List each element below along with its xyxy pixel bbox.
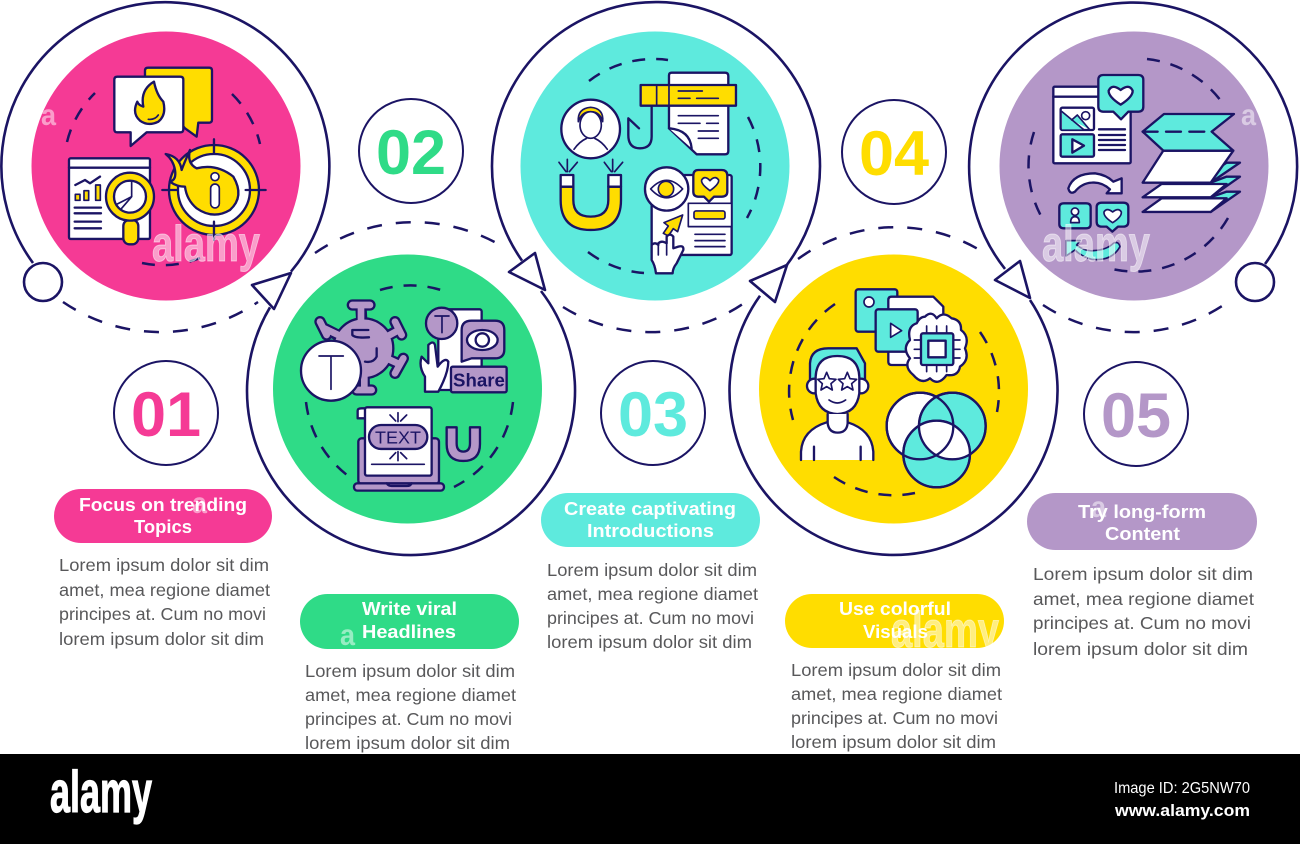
watermarks: alamy	[1042, 216, 1150, 272]
text block: step 4: principes at. Cum no movi	[791, 708, 998, 728]
icon: headline hook and document	[628, 73, 736, 154]
footer bar	[0, 754, 1300, 844]
icon: attraction magnet	[559, 159, 623, 230]
panel: step 2 green disc	[273, 254, 542, 524]
icon: chat bubbles with flame	[114, 68, 212, 146]
text block: step 1: amet, mea regione diamet	[59, 580, 270, 600]
label pill: Focus on trending Topics	[54, 489, 272, 543]
label pill: Write viral Headlines	[300, 594, 519, 649]
text block: step 2: Lorem ipsum dolor sit dim	[305, 661, 515, 681]
step 3 ring and dashed connector	[492, 2, 820, 332]
footer logo: alamy	[50, 760, 152, 825]
text block: step 4	[791, 660, 1002, 752]
number badge 04: 04	[859, 119, 929, 189]
icon: share document with eye: Share	[453, 369, 505, 390]
text block: step 1: Lorem ipsum dolor sit dim	[59, 555, 269, 575]
text block: step 2: principes at. Cum no movi	[305, 709, 512, 729]
panel: step 4 yellow disc	[759, 254, 1028, 524]
watermarks: a	[340, 619, 355, 652]
arrow: step 2 to 3	[509, 253, 545, 290]
panel: step 1 pink disc	[32, 32, 300, 300]
icon: horseshoe magnet	[447, 427, 480, 461]
text block: step 5: lorem ipsum dolor sit dim	[1033, 639, 1248, 659]
label pill: Create captivating Introductions: Introductions	[587, 521, 714, 541]
text block: step 2: lorem ipsum dolor sit dim	[305, 733, 510, 753]
number badge 01: 01	[131, 380, 201, 450]
number badge 05: 05	[1101, 381, 1171, 451]
text block: step 4: Lorem ipsum dolor sit dim	[791, 660, 1001, 680]
text block: step 1	[59, 555, 270, 649]
watermarks: a	[192, 487, 207, 520]
text block: step 2	[305, 661, 516, 753]
icon: virus with T badge	[301, 305, 403, 401]
icon: long-form post with like	[1053, 75, 1143, 163]
text block: step 5: principes at. Cum no movi	[1033, 613, 1251, 633]
text block: step 3: Lorem ipsum dolor sit dim	[547, 560, 757, 580]
icon: person with star eyes	[801, 348, 873, 460]
text block: step 5: amet, mea regione diamet	[1033, 589, 1254, 609]
website: www.alamy.com	[1114, 801, 1250, 820]
arrow: step 3 to 4	[750, 265, 787, 302]
number badge 03: 03	[618, 380, 688, 450]
icon: laptop with text headline	[354, 407, 444, 491]
label pill: Write viral Headlines: Headlines	[362, 622, 456, 642]
step 4 ring and dashed connector	[730, 227, 1058, 555]
icon: colour venn diagram	[887, 393, 986, 487]
watermarks	[41, 99, 1256, 658]
icon: swap arrows and reaction bubbles	[1059, 173, 1128, 260]
label pill: Use colorful Visuals: Use colorful	[839, 599, 951, 619]
icon: person in circle	[561, 100, 620, 158]
arrow: step 4 to 5	[995, 261, 1030, 298]
text block: step 3: amet, mea regione diamet	[547, 584, 758, 604]
icon: eye, post and pointing hand	[645, 167, 732, 273]
panel: step 5 purple disc	[1000, 32, 1268, 300]
watermarks: a	[1241, 99, 1256, 132]
text block: step 1: principes at. Cum no movi	[59, 604, 266, 624]
number badge 03	[601, 361, 705, 465]
icon: laptop with text headline: TEXT	[375, 428, 421, 448]
label pill: Create captivating Introductions: Create captivating	[564, 499, 736, 519]
label pill: Focus on trending Topics: Focus on trending	[79, 495, 247, 515]
watermarks: a	[1091, 491, 1106, 524]
text block: step 3: principes at. Cum no movi	[547, 608, 754, 628]
label pill: Use colorful Visuals: Visuals	[863, 622, 928, 642]
icon: folded pages stack	[1143, 114, 1240, 212]
icon: report with magnifier	[69, 158, 154, 244]
number badge 05	[1084, 362, 1188, 466]
label pill: Create captivating Introductions	[541, 493, 760, 547]
panel: step 3 teal disc	[520, 32, 790, 300]
text block: step 4: amet, mea regione diamet	[791, 684, 1002, 704]
image ID: Image ID: 2G5NW70	[1114, 780, 1250, 797]
text block: step 1: lorem ipsum dolor sit dim	[59, 629, 264, 649]
number badge 01	[114, 361, 218, 465]
label pill: Write viral Headlines: Write viral	[362, 599, 457, 619]
start node circle	[24, 263, 62, 301]
step 5 ring and dashed connector	[969, 3, 1297, 332]
arrow: step 1 to 2	[252, 273, 291, 309]
text block: step 5	[1033, 564, 1254, 659]
icon: viral info target	[162, 139, 266, 240]
label pill: Focus on trending Topics: Topics	[134, 517, 192, 537]
text block: step 2: amet, mea regione diamet	[305, 685, 516, 705]
icon: share document with eye	[421, 308, 507, 392]
icon: media files and AI brain	[856, 289, 967, 382]
number badge 02	[359, 99, 463, 203]
text block: step 3: lorem ipsum dolor sit dim	[547, 632, 752, 652]
step 1 ring and dashed connector	[1, 2, 329, 332]
end node circle	[1236, 263, 1274, 301]
watermarks: a	[41, 99, 56, 132]
label pill: Use colorful Visuals	[785, 594, 1004, 648]
text block: step 3	[547, 560, 758, 652]
watermarks: alamy	[152, 216, 260, 272]
text block: step 4: lorem ipsum dolor sit dim	[791, 732, 996, 752]
number badge 04	[842, 100, 946, 204]
label pill: Try long-form Content: Content	[1105, 524, 1180, 544]
step 2 ring and dashed connector	[247, 222, 575, 555]
watermarks: alamy	[891, 602, 999, 658]
number badge 02: 02	[376, 118, 446, 188]
text block: step 5: Lorem ipsum dolor sit dim	[1033, 564, 1253, 584]
label pill: Try long-form Content: Try long-form	[1078, 502, 1206, 522]
label pill: Try long-form Content	[1027, 493, 1257, 550]
